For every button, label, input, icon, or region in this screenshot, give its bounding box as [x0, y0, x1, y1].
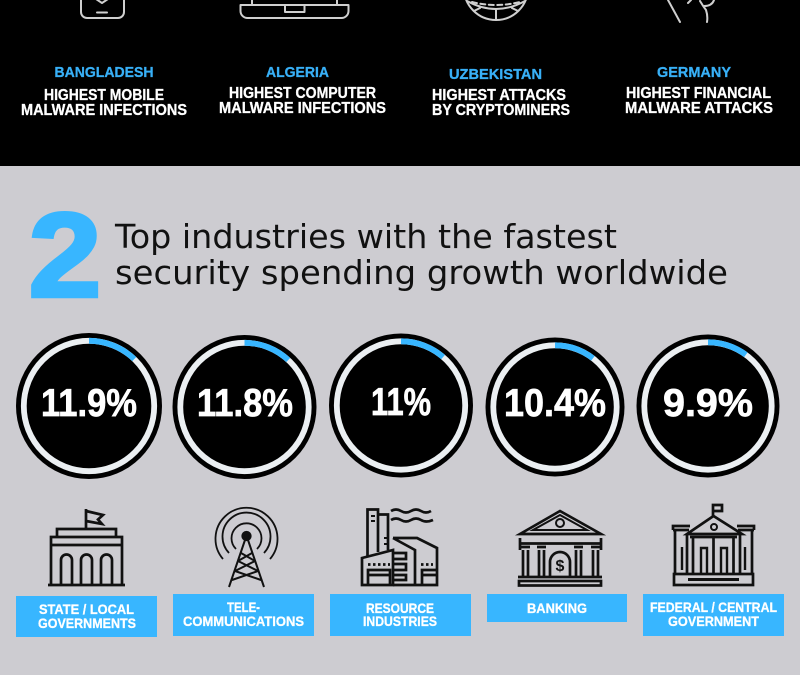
label: state / local governments: [16, 596, 157, 637]
label: telecommunications: COMMUNICATIONS: [183, 613, 304, 629]
icon: federal building: [673, 505, 754, 585]
gauge: 11.8%: 11.8%: [197, 382, 293, 425]
label: federal / central government: [643, 594, 784, 636]
label: resource industries: RESOURCE: [366, 600, 434, 616]
label: state / local governments: GOVERNMENTS: [38, 615, 136, 631]
icon: laptop: [240, 0, 348, 18]
label: banking: [487, 594, 627, 622]
text: Germany: [625, 64, 773, 117]
label: resource industries: [330, 594, 471, 636]
panel: countries with highest malware: [0, 0, 800, 166]
text: Algeria: ALGERIA: [266, 64, 329, 81]
label: state / local governments: STATE / LOCAL: [39, 601, 134, 617]
heading: security spending growth worldwide: [115, 254, 728, 292]
icon: bank: [518, 511, 602, 586]
icon: factory: [362, 510, 437, 585]
section number 2: 2: [28, 188, 102, 322]
gauge: 11.9%: 11.9%: [41, 382, 137, 425]
text: Algeria: [219, 64, 386, 117]
text: Uzbekistan: UZBEKISTAN: [449, 66, 542, 83]
text: Uzbekistan: [432, 66, 570, 119]
label: telecommunications: [173, 594, 314, 636]
text: Algeria: MALWARE INFECTIONS: [219, 100, 386, 117]
text: Uzbekistan: HIGHEST ATTACKS: [432, 87, 566, 104]
gauge: 9.9%: 9.9%: [663, 382, 753, 425]
text: Germany: GERMANY: [657, 64, 731, 81]
icon: hand: [668, 0, 714, 22]
text: Uzbekistan: BY CRYPTOMINERS: [432, 102, 570, 119]
label: federal / central government: GOVERNMENT: [668, 613, 759, 629]
text: Algeria: HIGHEST COMPUTER: [229, 85, 376, 102]
text: Bangladesh: BANGLADESH: [54, 64, 154, 81]
gauge: 10.4%: [486, 338, 624, 476]
text: Germany: MALWARE ATTACKS: [625, 100, 773, 117]
text: Germany: HIGHEST FINANCIAL: [626, 85, 771, 102]
icon: telecom tower: [216, 508, 278, 587]
label: resource industries: INDUSTRIES: [363, 613, 437, 629]
label: federal / central government: FEDERAL / CENTRAL: [650, 599, 777, 615]
text: Bangladesh: [21, 64, 187, 119]
gauge: 11%: 11%: [371, 381, 431, 424]
icon: bank: $: [556, 558, 565, 575]
panel: top industries: [0, 166, 800, 675]
heading: [114, 218, 728, 292]
icon: globe: [464, 0, 528, 20]
gauge: 11%: [329, 334, 473, 478]
text: Bangladesh: HIGHEST MOBILE: [44, 87, 164, 104]
gauge: 9.9%: [636, 334, 780, 478]
gauge: 11.8%: [172, 335, 316, 479]
gauge: 11.9%: [16, 333, 162, 479]
icon: mobile phone: [81, 0, 124, 18]
heading: Top industries with the fastest: [114, 218, 617, 256]
label: telecommunications: TELE-: [227, 599, 260, 615]
gauge: 10.4%: 10.4%: [504, 382, 606, 425]
label: banking: BANKING: [527, 600, 587, 616]
text: Bangladesh: MALWARE INFECTIONS: [21, 102, 187, 119]
icon: state building: [48, 509, 125, 585]
